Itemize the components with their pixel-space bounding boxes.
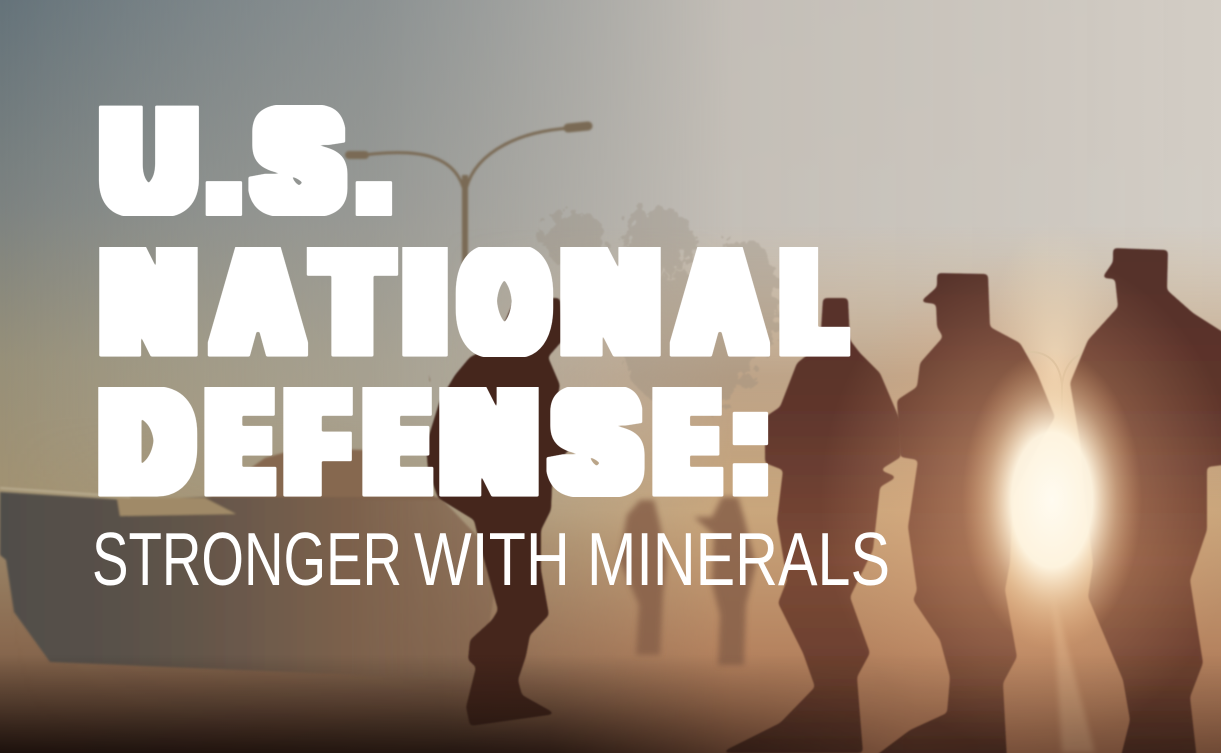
dark ground haze bbox=[0, 655, 1221, 753]
sun flare bbox=[820, 250, 1221, 753]
title bbox=[103, 82, 840, 520]
title line: DEFENSE:: D bbox=[103, 362, 189, 520]
distant soldiers bbox=[619, 497, 756, 665]
title line: NATIONAL: I bbox=[406, 222, 444, 380]
title line: NATIONAL: T bbox=[319, 222, 386, 380]
hazy trees bbox=[543, 208, 779, 410]
title line: U.S.: S bbox=[258, 82, 339, 239]
title: : bbox=[739, 362, 761, 520]
title line: U.S.: U bbox=[105, 82, 193, 239]
title line: U.S.: . bbox=[364, 82, 384, 239]
title line: DEFENSE:: S bbox=[556, 362, 636, 520]
soft light behind soldiers bbox=[985, 220, 1125, 520]
title line: U.S.: . bbox=[214, 82, 234, 239]
title line: DEFENSE:: E bbox=[370, 362, 424, 520]
title line: NATIONAL: N bbox=[104, 222, 193, 380]
title line: NATIONAL: O bbox=[464, 222, 544, 380]
distant lamp behind soldiers bbox=[1025, 350, 1095, 430]
subtitle: MINERALS bbox=[587, 517, 890, 601]
soldier silhouette: far right bbox=[1070, 248, 1221, 753]
soldier silhouette: right of center bbox=[870, 273, 1055, 753]
title line: NATIONAL: N bbox=[565, 222, 656, 380]
soldier silhouette: center right bbox=[720, 298, 901, 753]
street lamp bbox=[349, 126, 588, 265]
title line: DEFENSE:: F bbox=[291, 362, 343, 520]
middle soldier silhouette bbox=[425, 298, 572, 726]
title line: DEFENSE:: E bbox=[212, 362, 267, 520]
title line: NATIONAL: A bbox=[218, 222, 298, 380]
subtitle: STRONGER bbox=[92, 517, 402, 601]
title line: NATIONAL: A bbox=[680, 222, 760, 380]
title line: NATIONAL: L bbox=[787, 222, 840, 380]
title line: DEFENSE:: N bbox=[444, 362, 534, 520]
subtitle: WITH bbox=[414, 517, 570, 601]
armored vehicle in haze bbox=[0, 448, 500, 680]
title line: DEFENSE:: E bbox=[660, 362, 714, 520]
